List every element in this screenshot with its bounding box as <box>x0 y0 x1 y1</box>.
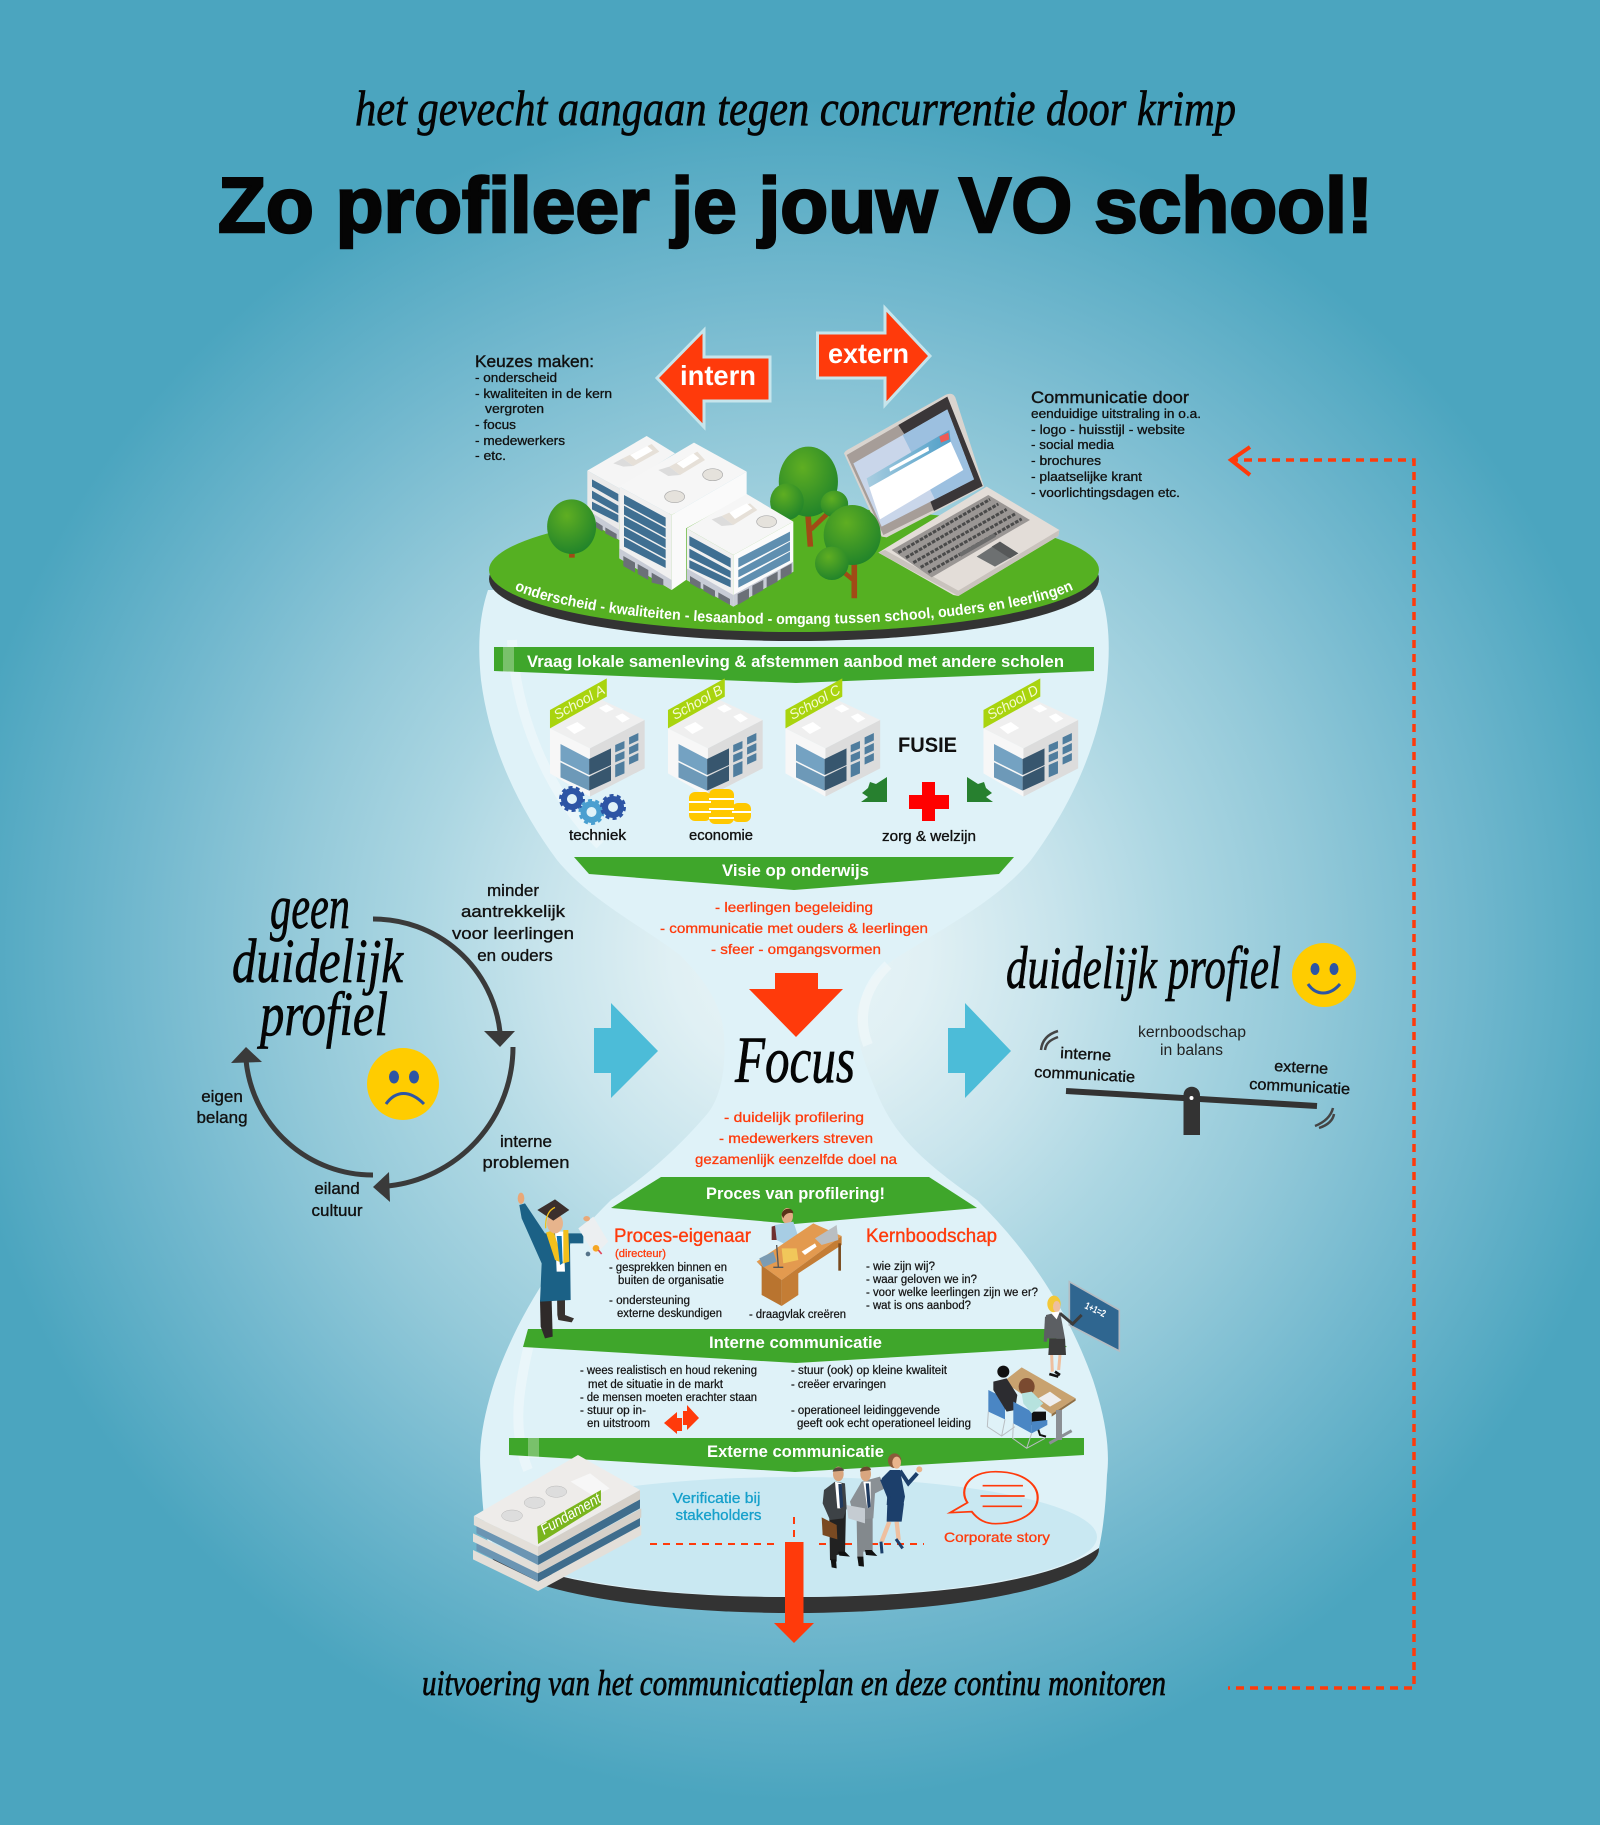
blackboard <box>1069 1282 1119 1351</box>
school C <box>785 678 880 797</box>
arrow: extern <box>818 308 930 405</box>
text: board sum: 1+1=2 <box>1083 1301 1108 1320</box>
list: focus: - medewerkers streven <box>719 1130 873 1146</box>
text: kernboodschap: - voor welke leerlingen zijn we er? <box>866 1287 1038 1299</box>
list: visie <box>660 899 928 957</box>
text: communicatie door: - social media <box>1031 437 1115 452</box>
text: verificatie <box>672 1491 762 1524</box>
heading: duidelijk profiel: duidelijk profiel <box>1006 935 1281 1001</box>
cycle: geen duidelijk profiel <box>196 874 574 1220</box>
label: zorg en welzijn: zorg & welzijn <box>882 829 976 845</box>
list: visie: - communicatie met ouders & leerlingen <box>660 920 928 936</box>
hourglass base disc <box>489 1485 1099 1613</box>
list: interne left: - wees realistisch en houd rekening <box>580 1365 757 1377</box>
text: fundament: Fundament <box>538 1490 605 1538</box>
list: interne right: - operationeel leidinggevende <box>791 1405 940 1417</box>
banner: visie: Visie op onderwijs <box>722 861 869 880</box>
icon: speech bubble <box>950 1472 1038 1524</box>
front trees <box>547 499 881 598</box>
cycle labels <box>196 881 574 1220</box>
list: interne right: geeft ook echt operationeel leiding <box>797 1418 971 1430</box>
man with briefcase <box>822 1467 850 1568</box>
glass floor <box>491 1477 1097 1597</box>
list: visie: - sfeer - omgangsvormen <box>711 941 881 957</box>
illustration: stakeholders <box>822 1453 922 1568</box>
title: subtitle line: het gevecht aangaan tegen concurrentie door krimp <box>355 80 1236 136</box>
graduate <box>518 1193 608 1338</box>
banner: proces <box>611 1177 977 1224</box>
text: keuzes maken: - medewerkers <box>475 433 566 448</box>
list: focus <box>695 1109 897 1167</box>
laptop <box>844 394 1059 596</box>
text: proces-eigenaar: - ondersteuning <box>609 1295 690 1307</box>
cycle labels: cultuur <box>311 1201 363 1220</box>
icon: happy face <box>1292 943 1356 1007</box>
label: economie: economie <box>689 828 753 844</box>
balance scale: communicatie <box>1249 1076 1351 1098</box>
text: keuzes maken <box>475 352 612 463</box>
text: kernboodschap: - wie zijn wij? <box>866 1261 935 1273</box>
title: main heading: Zo profileer je jouw VO school! <box>218 161 1373 249</box>
text: keuzes maken: - onderscheid <box>475 370 557 385</box>
heading words <box>232 874 404 1049</box>
icon: coins <box>689 789 751 824</box>
school B <box>668 678 763 797</box>
woman <box>881 1453 922 1553</box>
list: interne left: en uitstroom <box>587 1418 650 1430</box>
fusie arrows <box>861 777 993 802</box>
arrow: extern: extern <box>828 338 909 369</box>
list: interne left <box>580 1365 757 1430</box>
list: interne right: - stuur (ook) op kleine kwaliteit <box>791 1365 948 1377</box>
top island disc <box>489 508 1099 641</box>
banner: visie <box>574 857 1014 890</box>
school B: School B <box>669 681 725 723</box>
cycle arrows <box>246 919 513 1186</box>
list: interne left: met de situatie in de markt <box>588 1379 724 1391</box>
text: kernboodschap: Kernboodschap <box>866 1226 997 1247</box>
list: focus: - duidelijk profilering <box>724 1109 864 1125</box>
balance scale: interne <box>1060 1045 1112 1065</box>
illustration: graduate and desk <box>518 1193 842 1338</box>
text: proces-eigenaar <box>609 1226 752 1320</box>
curved island text: onderscheid - kwaliteiten - lesaanbod - omgang tussen school, ouders en leerlingen <box>516 583 1073 628</box>
building back <box>587 436 675 540</box>
cycle labels: problemen <box>482 1153 570 1172</box>
students at desk <box>987 1366 1076 1448</box>
list: visie: - leerlingen begeleiding <box>715 899 873 915</box>
text: verificatie: stakeholders <box>676 1508 762 1524</box>
balance scale <box>1034 1024 1351 1135</box>
fundament block <box>473 1455 641 1591</box>
heading words: duidelijk <box>232 928 404 996</box>
text: corporate story: Corporate story <box>944 1529 1050 1545</box>
banner: proces: Proces van profilering! <box>706 1184 885 1203</box>
building front <box>687 494 793 607</box>
text: uitvoering: uitvoering van het communicatieplan en deze continu monitoren <box>422 1663 1166 1703</box>
balance scale: communicatie <box>1034 1064 1136 1086</box>
text: kernboodschap <box>866 1226 1038 1312</box>
heading words: geen <box>270 874 350 942</box>
icon: in and out arrows <box>664 1405 699 1434</box>
illustration: teacher and students <box>987 1282 1119 1448</box>
text: communicatie door: eenduidige uitstraling in o.a. <box>1031 406 1201 421</box>
banner: externe communicatie <box>509 1438 1084 1472</box>
text: communicatie door <box>1031 388 1201 500</box>
arrow: intern <box>657 330 770 427</box>
cycle labels: eigen <box>201 1087 243 1106</box>
arrow: blue left <box>594 1003 658 1098</box>
text: proces-eigenaar: - gesprekken binnen en <box>609 1262 727 1274</box>
text: keuzes maken: Keuzes maken: <box>475 352 594 371</box>
text: communicatie door: - logo - huisstijl - website <box>1031 422 1185 437</box>
school C: School C <box>786 681 844 723</box>
cycle labels: interne <box>500 1132 552 1151</box>
sound marks <box>1041 1031 1334 1128</box>
teacher <box>1045 1296 1082 1377</box>
list: interne left: - stuur op in- <box>580 1405 646 1417</box>
icon: gears <box>560 788 624 824</box>
schools <box>550 678 1078 797</box>
school A <box>550 678 645 797</box>
banner: interne communicatie <box>523 1329 1067 1363</box>
text: communicatie door: - voorlichtingsdagen etc. <box>1031 485 1180 500</box>
text: proces-eigenaar: externe deskundigen <box>617 1308 722 1320</box>
glass body <box>479 590 1109 1597</box>
text: keuzes maken: - focus <box>475 417 517 432</box>
arrow: blue right <box>948 1003 1011 1098</box>
cycle labels: belang <box>196 1108 248 1127</box>
heading: focus: Focus <box>734 1024 855 1097</box>
cycle labels: eiland <box>314 1179 360 1198</box>
disc edge <box>489 517 1099 641</box>
arrow: down <box>774 1542 814 1643</box>
arrow: intern: intern <box>680 360 756 391</box>
text: keuzes maken: vergroten <box>485 401 544 416</box>
text: proces-eigenaar: buiten de organisatie <box>618 1275 724 1287</box>
glass highlights <box>512 640 888 1470</box>
label: techniek: techniek <box>569 828 627 844</box>
feedback loop arrow <box>1228 447 1414 1688</box>
hourglass <box>479 590 1109 1613</box>
text: proces-eigenaar: Proces-eigenaar <box>614 1226 752 1247</box>
list: interne left: - de mensen moeten erachter staan <box>580 1392 757 1404</box>
cycle labels: voor leerlingen <box>452 924 574 943</box>
list: interne right <box>791 1365 971 1430</box>
school D: School D <box>984 681 1041 723</box>
icon: red cross <box>909 782 949 821</box>
grass <box>489 508 1099 632</box>
back trees <box>770 447 848 547</box>
scale labels: kernboodschap <box>1138 1024 1246 1041</box>
school buildings <box>587 436 793 607</box>
banner: interne communicatie: Interne communicatie <box>709 1333 882 1352</box>
balance scale: in balans <box>1160 1042 1223 1059</box>
dashed lines <box>650 1517 924 1544</box>
text: keuzes maken: - etc. <box>475 448 506 463</box>
desk with person <box>757 1208 842 1306</box>
school D <box>983 678 1078 797</box>
list: focus: gezamenlijk eenzelfde doel na <box>695 1151 897 1167</box>
list: interne right: - creëer ervaringen <box>791 1379 886 1391</box>
text: proces-eigenaar: (directeur) <box>615 1248 666 1260</box>
cycle labels: minder <box>487 881 539 900</box>
arrow: focus <box>749 973 843 1037</box>
building middle <box>619 443 747 590</box>
heading words: profiel <box>257 981 388 1049</box>
text: kernboodschap: - wat is ons aanbod? <box>866 1300 971 1312</box>
banner: externe communicatie: Externe communicatie <box>707 1442 884 1461</box>
text: communicatie door: - plaatselijke krant <box>1031 469 1142 484</box>
text: communicatie door: - brochures <box>1031 453 1102 468</box>
text: verificatie: Verificatie bij <box>672 1491 760 1507</box>
text: draagvlak: - draagvlak creëren <box>749 1309 846 1321</box>
cycle labels: aantrekkelijk <box>461 902 566 921</box>
man on phone <box>847 1467 885 1567</box>
school A: School A <box>551 681 607 723</box>
text: kernboodschap: - waar geloven we in? <box>866 1274 977 1286</box>
cycle labels: en ouders <box>477 946 553 965</box>
text: communicatie door: Communicatie door <box>1031 388 1189 407</box>
icon: sad face <box>367 1048 439 1120</box>
banner: vraag <box>494 647 1094 683</box>
label: fusie: FUSIE <box>898 734 957 757</box>
banner: vraag: Vraag lokale samenleving & afstemmen aanbod met andere scholen <box>527 652 1064 671</box>
text: keuzes maken: - kwaliteiten in de kern <box>475 386 612 401</box>
balance scale: externe <box>1274 1058 1329 1078</box>
